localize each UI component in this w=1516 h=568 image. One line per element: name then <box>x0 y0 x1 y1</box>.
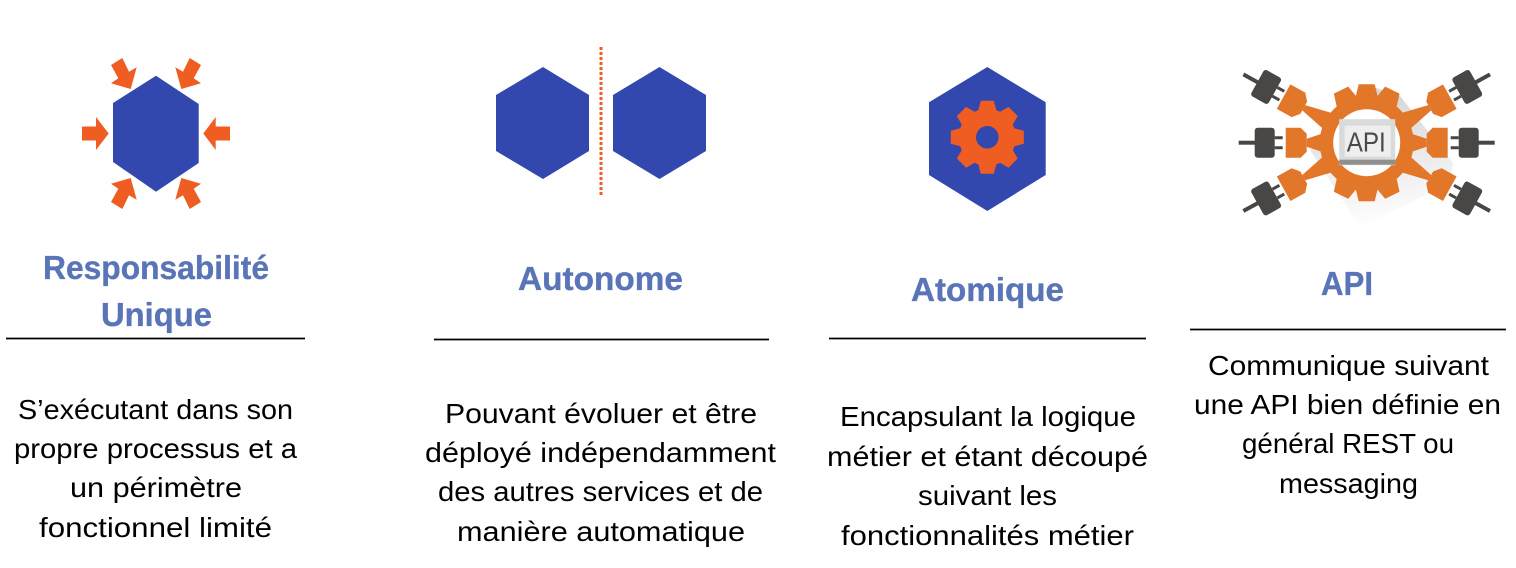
text: description Atomique: Encapsulant la logique <box>840 401 1136 432</box>
heading: Responsabilité Unique <box>43 249 269 333</box>
text: description Responsabilité Unique: fonctionnel limité <box>39 512 272 543</box>
text: description Responsabilité Unique: un périmètre <box>70 472 242 503</box>
text: description Atomique: métier et étant découpé <box>827 441 1148 472</box>
icon: two hexagons separated by dotted line <box>496 47 706 196</box>
heading: API: API <box>1321 265 1373 302</box>
text: description Responsabilité Unique: S’exécutant dans son <box>18 394 293 425</box>
text: description Autonome: Pouvant évoluer et être <box>445 398 757 429</box>
text: description Autonome <box>425 398 776 547</box>
text: description API: une API bien définie en <box>1194 389 1501 420</box>
text: description Autonome: déployé indépendamment <box>425 437 776 468</box>
text: description Autonome: manière automatique <box>457 516 745 547</box>
icon: API gear with plugs <box>1236 61 1497 227</box>
panel: Autonome <box>425 47 776 547</box>
text: description API: Communique suivant <box>1208 350 1489 381</box>
icon: hexagon with inward arrows <box>82 58 230 209</box>
heading: Responsabilité Unique: Responsabilité <box>43 249 269 286</box>
panel: Responsabilité Unique <box>6 58 305 543</box>
heading: Atomique: Atomique <box>911 271 1064 308</box>
text: description Autonome: des autres services et de <box>438 476 763 507</box>
icon: hexagon with gear <box>929 67 1046 211</box>
panel: Atomique <box>827 67 1148 551</box>
text: description Atomique <box>827 401 1148 551</box>
heading: Responsabilité Unique: Unique <box>101 296 212 333</box>
text: description API <box>1194 350 1501 499</box>
icon: API gear with plugs: API <box>1347 127 1386 158</box>
text: description Atomique: fonctionnalités métier <box>841 520 1134 551</box>
text: description Responsabilité Unique: propre processus et a <box>14 433 298 464</box>
heading: Autonome: Autonome <box>518 260 683 297</box>
text: description API: messaging <box>1279 468 1418 499</box>
text: description Atomique: suivant les <box>918 480 1057 511</box>
panel: API <box>1190 61 1506 499</box>
text: description Responsabilité Unique <box>14 394 298 543</box>
text: description API: général REST ou <box>1242 428 1454 459</box>
